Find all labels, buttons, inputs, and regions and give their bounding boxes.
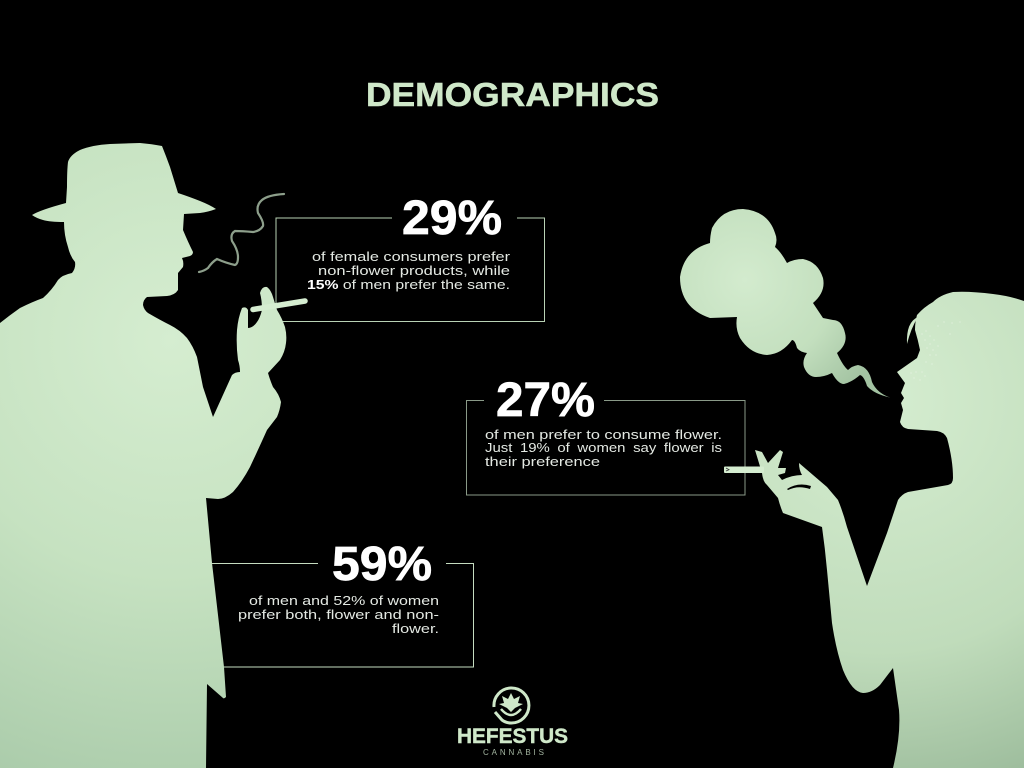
icon: leaf bbox=[499, 693, 523, 712]
forehead dots bbox=[911, 322, 960, 380]
icon: smile arc bbox=[501, 709, 521, 715]
panel: 59% stat: flower. bbox=[392, 621, 439, 636]
icon: cigarette bbox=[724, 466, 764, 473]
icon: logo ring bbox=[494, 688, 529, 723]
panel: 29% stat: non-flower products, while bbox=[318, 263, 510, 278]
panel: 59% stat: prefer both, flower and non- bbox=[238, 607, 439, 622]
logo bbox=[457, 688, 568, 757]
panel: 29% stat: 29% bbox=[402, 192, 502, 245]
logo: HEFESTUS bbox=[457, 725, 568, 748]
smoke cloud bbox=[680, 209, 890, 398]
panel: 59% stat bbox=[210, 538, 474, 667]
hand gap bbox=[787, 485, 811, 490]
hair strand bbox=[907, 317, 918, 344]
title: DEMOGRAPHICS bbox=[366, 76, 659, 113]
icon: cigarette bbox=[253, 301, 305, 310]
panel: 59% stat: of men and 52% of women bbox=[249, 593, 439, 608]
panel: 27% stat bbox=[466, 374, 745, 495]
panel: 29% stat: of female consumers prefer bbox=[312, 249, 511, 264]
panel: 29% stat bbox=[276, 192, 544, 322]
panel: 27% stat: Just 19% of women say flower is bbox=[485, 440, 723, 455]
man silhouette bbox=[0, 143, 305, 768]
smoke ribbon from cigarette bbox=[199, 194, 284, 272]
panel: 29% stat: 15% of men prefer the same. bbox=[307, 277, 510, 292]
panel: 27% stat: their preference bbox=[485, 454, 600, 469]
panel: 27% stat: of men prefer to consume flower. bbox=[485, 427, 722, 442]
woman silhouette bbox=[724, 292, 1024, 768]
logo: CANNABIS bbox=[483, 748, 544, 757]
panel: 27% stat: 27% bbox=[496, 374, 595, 427]
panel: 59% stat: 59% bbox=[332, 538, 432, 591]
